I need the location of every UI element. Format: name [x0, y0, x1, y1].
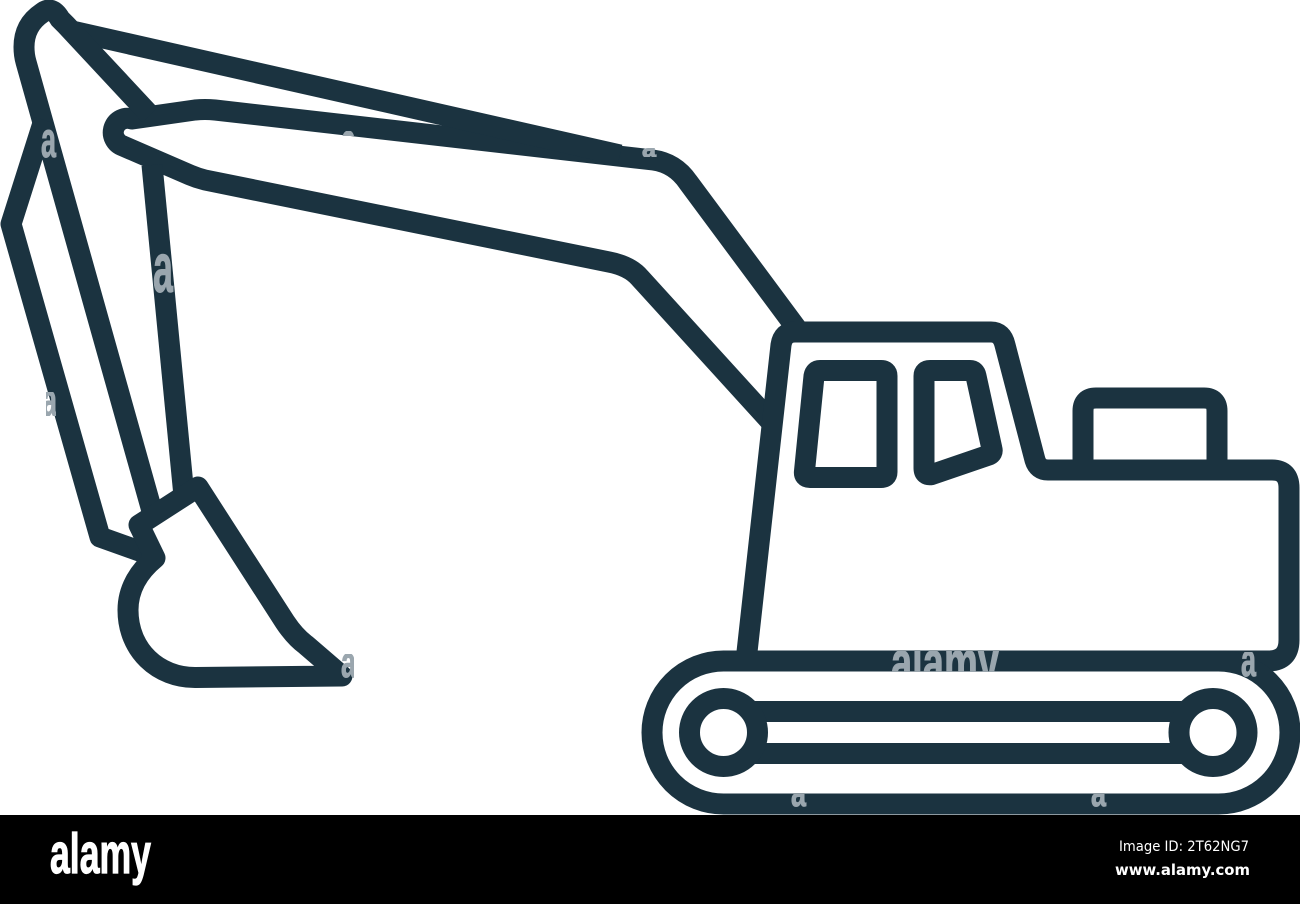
watermark letters	[41, 112, 1256, 815]
boom	[72, 31, 800, 423]
hydraulic cylinder on boom	[72, 31, 620, 155]
front cab window	[804, 370, 887, 478]
rear link arm	[11, 120, 156, 557]
left track wheel	[690, 698, 758, 766]
cabin and engine body	[745, 332, 1289, 661]
bucket	[128, 487, 342, 678]
watermark letters: a	[341, 113, 357, 169]
watermark letters: alamy	[891, 629, 999, 696]
right track wheel	[1179, 698, 1247, 766]
crawler track	[652, 661, 1290, 804]
website url: www.alamy.com	[1115, 861, 1250, 879]
side cab window	[924, 370, 992, 475]
watermark letters: a	[1241, 634, 1256, 686]
track rails	[735, 712, 1200, 754]
dipper stick	[24, 10, 152, 511]
watermark letters: a	[1091, 771, 1107, 815]
bucket cylinder rod	[152, 165, 184, 496]
boom outline	[113, 110, 800, 423]
track outline	[652, 661, 1290, 804]
image id: Image ID: 2T62NG7	[1119, 839, 1249, 855]
watermark letters: a	[642, 133, 657, 163]
watermark letters: a	[41, 112, 57, 168]
watermark letters: a	[791, 771, 807, 815]
black footer bar	[0, 815, 1300, 904]
alamy logo: alamy	[50, 822, 151, 886]
watermark letters: a	[42, 374, 57, 426]
engine exhaust box	[1083, 398, 1217, 470]
watermark letters: a	[341, 638, 356, 687]
watermark letters: a	[153, 229, 174, 307]
